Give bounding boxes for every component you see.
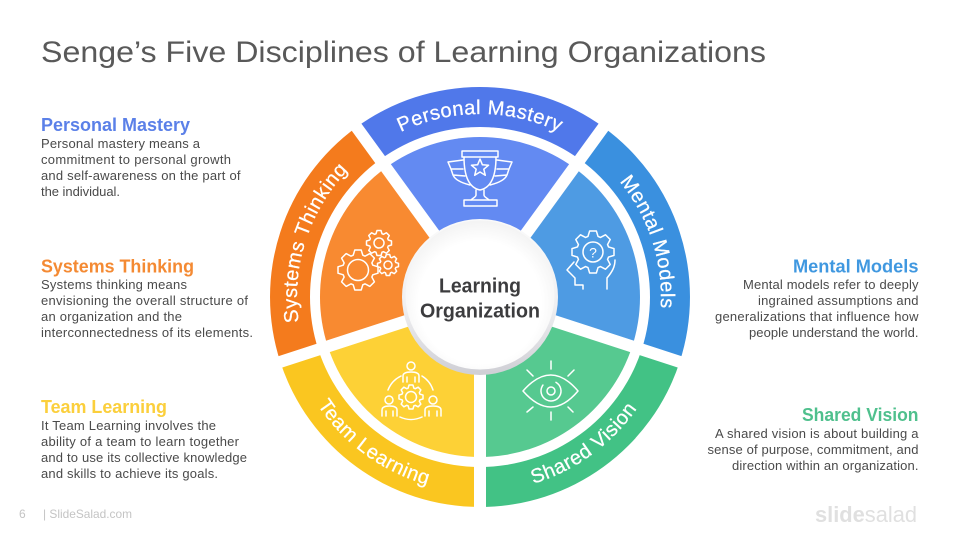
segment: mental models inner wedge: [480, 168, 640, 346]
text block: systems thinking: Systems thinking means: [41, 277, 188, 292]
text block: mental models: ingrained assumptions and: [758, 293, 918, 308]
icon: head with question gear: [567, 231, 615, 289]
segment: personal mastery inner wedge: [386, 137, 574, 297]
text block: mental models: Mental models refer to deeply: [743, 277, 919, 292]
center label: [420, 276, 540, 322]
text block: personal mastery: [41, 136, 241, 199]
text block: personal mastery: Personal mastery means a: [41, 136, 201, 151]
center label: Organization: [420, 300, 540, 322]
text block: systems thinking: envisioning the overall structure of: [41, 293, 248, 308]
logo: slidesalad: slidesalad: [815, 502, 917, 527]
text block: systems thinking: interconnectedness of its elements.: [41, 325, 253, 340]
text block: team learning: and skills to achieve its goals.: [41, 466, 218, 481]
label: team learning arc: Team Learning: [320, 397, 430, 488]
heading: personal mastery: Personal Mastery: [41, 114, 191, 135]
heading: mental models: Mental Models: [793, 256, 918, 276]
text block: team learning: ability of a team to learn together: [41, 434, 240, 449]
label: systems thinking arc: Systems Thinking: [284, 164, 349, 322]
segment: systems thinking outer ring: [270, 127, 380, 362]
title: Senge’s Five Disciplines of Learning Organizations: [41, 36, 766, 69]
text block: shared vision: direction within an organization.: [732, 458, 918, 473]
heading: team learning: Team Learning: [41, 396, 167, 417]
label: personal mastery arc: Personal Mastery: [396, 99, 564, 133]
icon: head with question gear: ?: [589, 244, 597, 260]
text block: shared vision: sense of purpose, commitment, and: [708, 442, 918, 457]
text block: mental models: generalizations that influence how: [715, 309, 919, 324]
footer: page number and site: | SlideSalad.com: [43, 507, 132, 521]
text block: systems thinking: an organization and the: [41, 309, 182, 324]
segment: team learning outer ring: [280, 350, 480, 507]
panel: personal mastery text: [41, 114, 241, 199]
footer: page number and site: 6: [19, 507, 26, 521]
icon: eye: [523, 361, 578, 420]
panel: shared vision text: [708, 404, 919, 473]
text block: team learning: It Team Learning involves the: [41, 418, 216, 433]
center label: Learning: [439, 276, 521, 298]
segment: mental models outer ring: [580, 127, 690, 362]
icon: team around gear: [382, 362, 441, 419]
chart: five disciplines wheel: [270, 87, 690, 507]
panel: mental models text: [715, 256, 919, 340]
icon: trophy: [448, 151, 512, 206]
segment: team learning inner wedge: [328, 297, 480, 457]
text block: personal mastery: the individual.: [41, 184, 120, 199]
segment: shared vision outer ring: [480, 350, 680, 507]
label: mental models arc: Mental Models: [620, 174, 676, 308]
text block: systems thinking: [41, 277, 253, 340]
segment: personal mastery outer ring: [357, 87, 603, 160]
text block: mental models: people understand the world.: [749, 325, 918, 340]
heading: shared vision: Shared Vision: [802, 404, 918, 425]
text block: mental models: [715, 277, 919, 340]
text block: team learning: and to use its collective knowledge: [41, 450, 247, 465]
text block: team learning: [41, 418, 247, 481]
icon: gears: [338, 230, 398, 290]
center circle: learning organization: [402, 219, 558, 375]
text block: personal mastery: commitment to personal growth: [41, 152, 231, 167]
segment: systems thinking inner wedge: [320, 168, 480, 346]
label: shared vision arc: Shared Vision: [531, 404, 636, 483]
segment: shared vision inner wedge: [480, 297, 632, 457]
text block: shared vision: [708, 426, 919, 473]
panel: systems thinking text: [41, 256, 253, 340]
panel: team learning text: [41, 396, 247, 481]
heading: systems thinking: Systems Thinking: [41, 256, 194, 276]
text block: personal mastery: and self-awareness on the part of: [41, 168, 241, 183]
text block: shared vision: A shared vision is about building a: [715, 426, 919, 441]
